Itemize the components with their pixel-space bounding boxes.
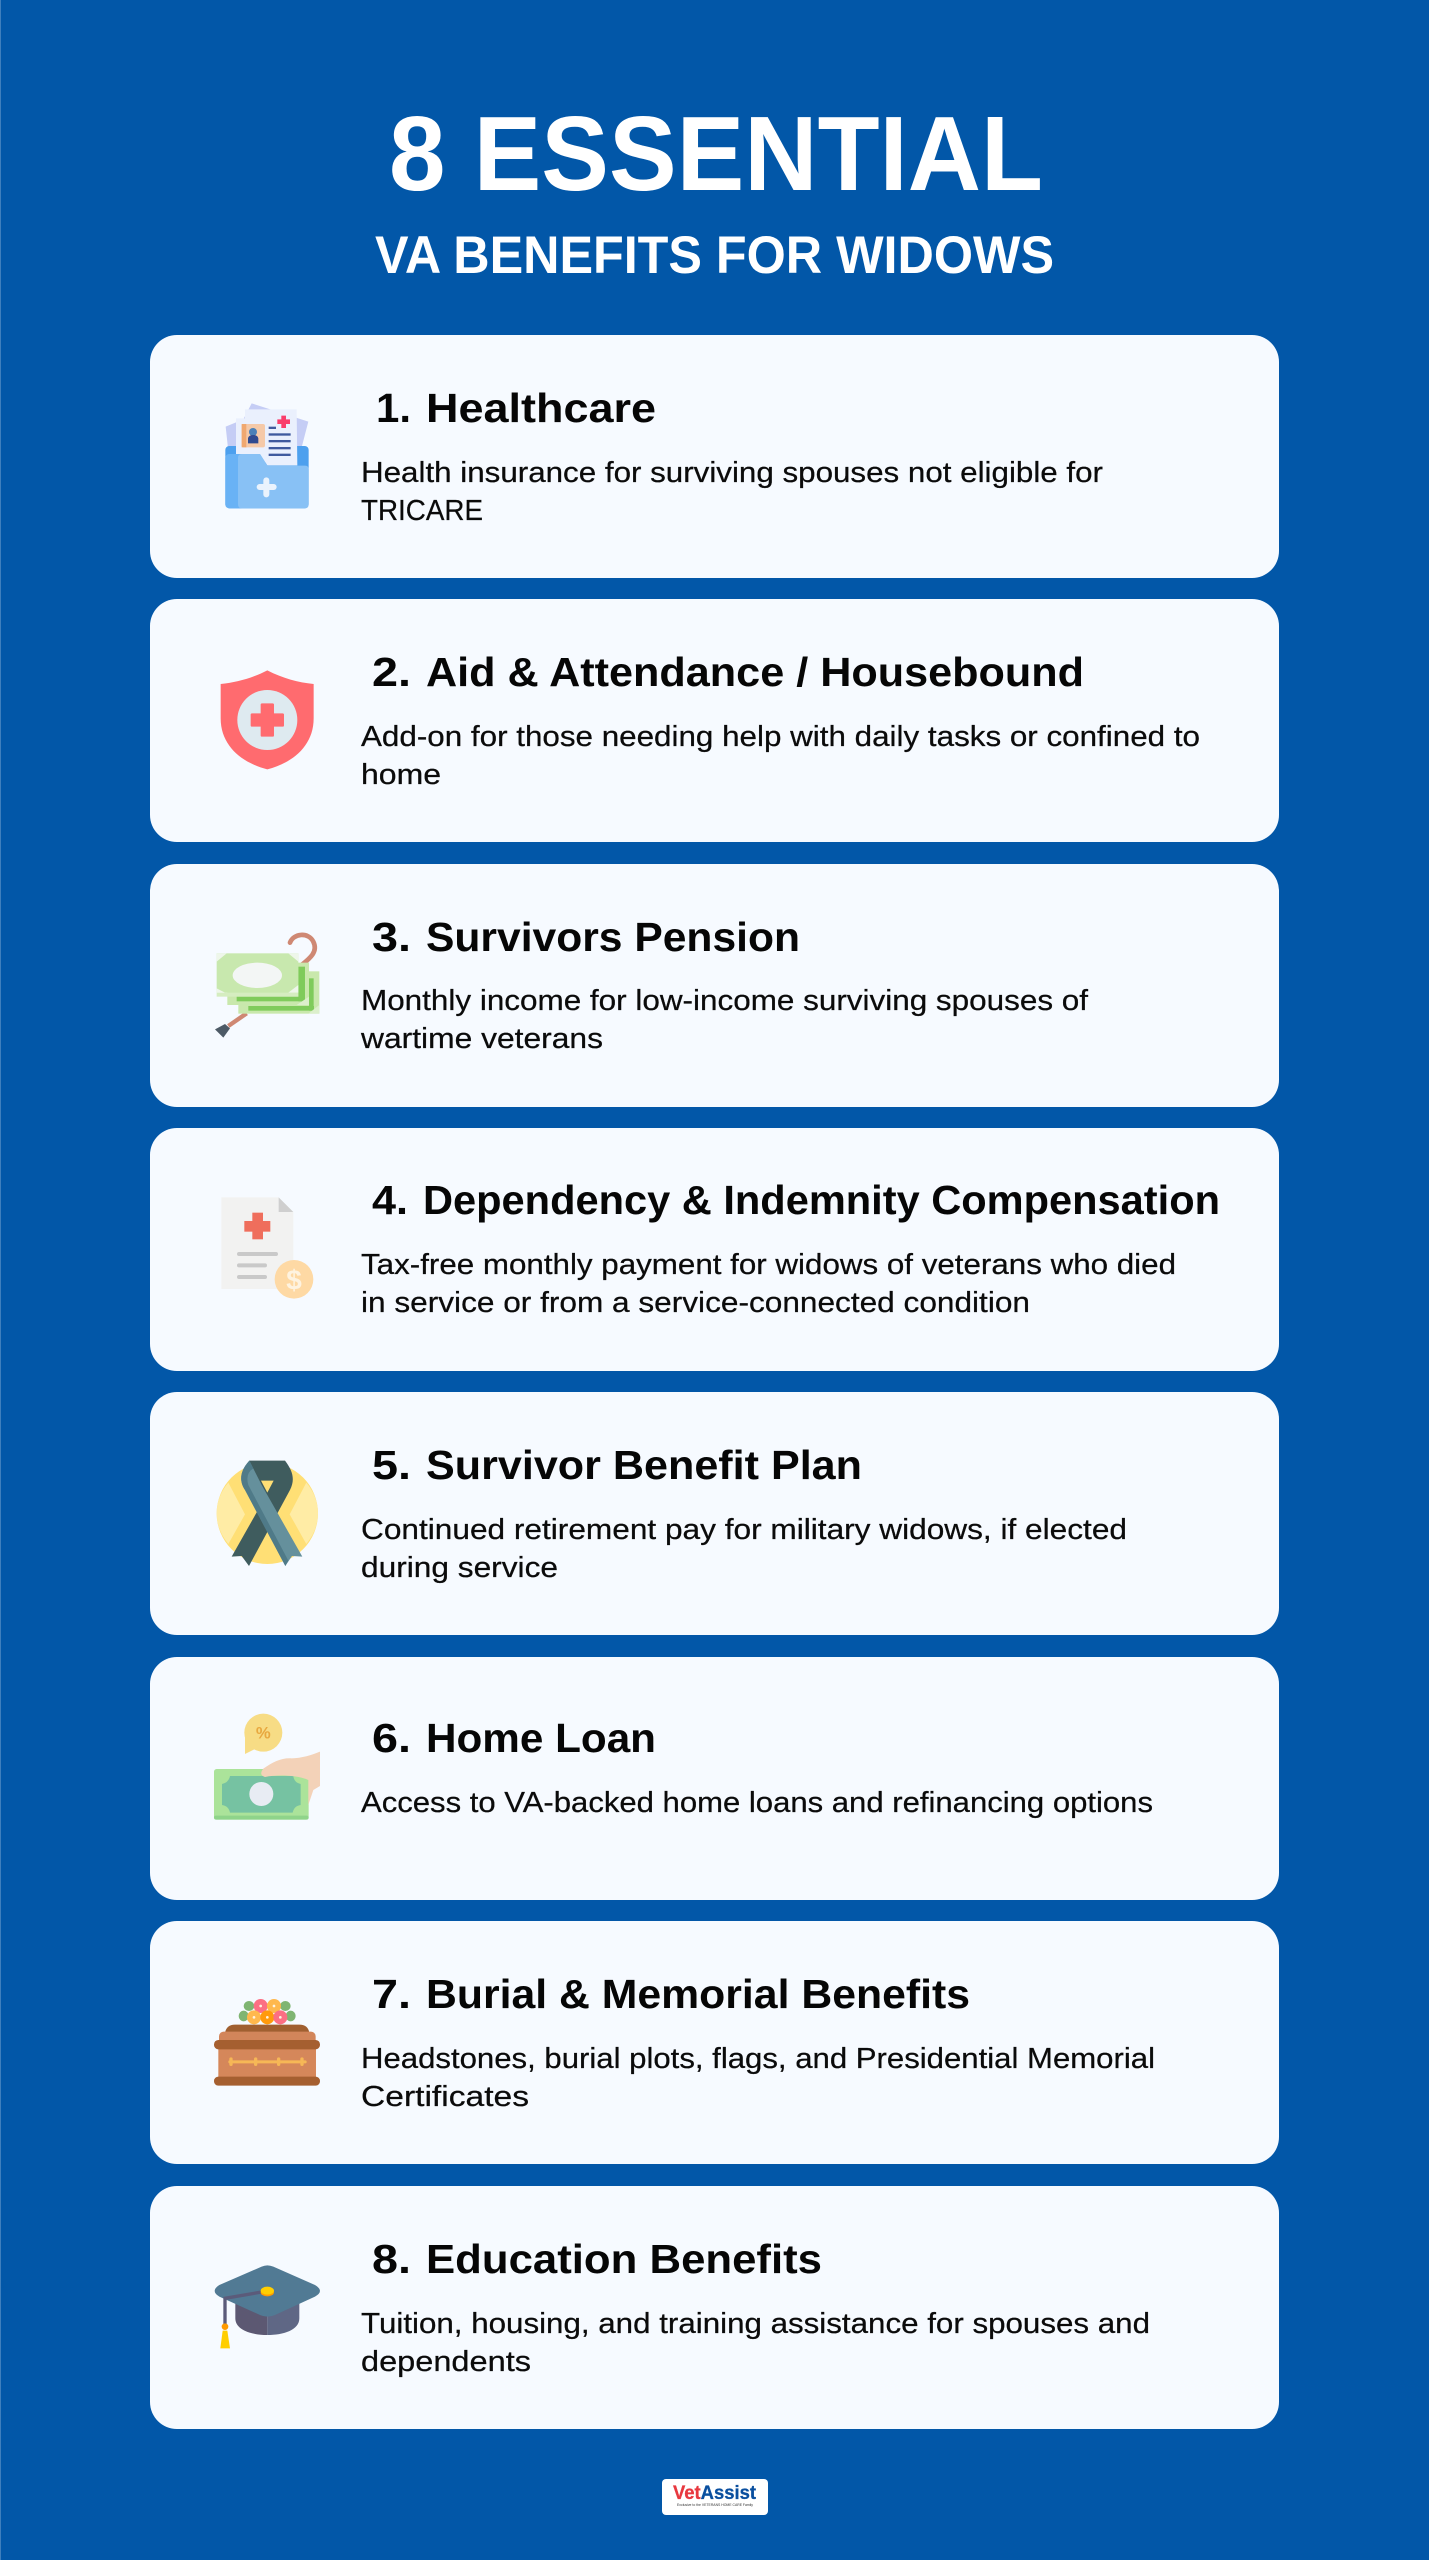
card background xyxy=(150,1128,1279,1371)
heading: 8. xyxy=(372,2236,411,2282)
description: wartime veterans xyxy=(360,1023,603,1055)
heading: Healthcare xyxy=(426,385,656,431)
title: 8 ESSENTIAL xyxy=(389,95,1043,213)
card background xyxy=(150,1392,1279,1635)
icon: graduation cap xyxy=(215,2265,320,2348)
panel: home loan xyxy=(150,1657,1279,1900)
card background xyxy=(150,335,1279,578)
heading: 3. xyxy=(372,914,411,960)
description: Tax-free monthly payment for widows of veterans who died xyxy=(361,1249,1176,1281)
description xyxy=(361,721,1200,791)
panel: survivors pension xyxy=(150,864,1279,1107)
icon: medical folder xyxy=(225,403,309,508)
heading: Survivors Pension xyxy=(426,914,800,960)
card background xyxy=(150,1657,1279,1900)
description: Headstones, burial plots, flags, and Presidential Memorial xyxy=(361,2043,1155,2075)
icon: medical bill: $ xyxy=(286,1264,302,1295)
logo: VetAssist xyxy=(662,2479,768,2515)
heading: 7. xyxy=(372,1971,411,2017)
heading: 4. xyxy=(372,1177,408,1223)
card background xyxy=(150,864,1279,1107)
description: Tuition, housing, and training assistance for spouses and xyxy=(361,2308,1150,2340)
card background xyxy=(150,599,1279,842)
description xyxy=(361,2308,1150,2378)
description: TRICARE xyxy=(361,495,483,527)
description xyxy=(361,1249,1176,1319)
heading: 1. xyxy=(376,385,411,431)
description: Certificates xyxy=(361,2081,529,2113)
panel: burial and memorial benefits xyxy=(150,1921,1279,2164)
icon: hand holding money xyxy=(214,1714,320,1820)
description: Monthly income for low-income surviving spouses of xyxy=(361,985,1089,1017)
card background xyxy=(150,2186,1279,2429)
heading: 2. xyxy=(372,649,411,695)
description: during service xyxy=(361,1552,558,1584)
heading: 6. xyxy=(372,1715,411,1761)
description xyxy=(361,457,1103,527)
subtitle: VA BENEFITS FOR WIDOWS xyxy=(375,226,1054,285)
description: dependents xyxy=(361,2346,531,2378)
card background xyxy=(150,1921,1279,2164)
description xyxy=(361,1514,1127,1584)
panel: survivor benefit plan xyxy=(150,1392,1279,1635)
logo: VetAssist: Exclusive to the VETERANS HOME CARE Family xyxy=(677,2502,753,2507)
icon: money stack with hook xyxy=(215,935,319,1038)
panel: dependency and indemnity compensation xyxy=(150,1128,1279,1371)
description: Add-on for those needing help with daily tasks or confined to xyxy=(361,721,1200,753)
icon: shield xyxy=(221,670,314,769)
logo: VetAssist: VetAssist xyxy=(673,2483,757,2504)
description xyxy=(361,2043,1155,2113)
heading: Home Loan xyxy=(426,1715,656,1761)
description: Access to VA-backed home loans and refinancing options xyxy=(361,1787,1153,1819)
heading: Burial & Memorial Benefits xyxy=(426,1971,970,2017)
description: in service or from a service-connected condition xyxy=(361,1287,1030,1319)
heading: Survivor Benefit Plan xyxy=(426,1442,862,1488)
icon: hand holding money: % xyxy=(256,1724,271,1743)
icon: ribbon xyxy=(217,1461,318,1566)
heading: Dependency & Indemnity Compensation xyxy=(423,1177,1220,1223)
heading: Aid & Attendance / Housebound xyxy=(426,649,1084,695)
description xyxy=(360,985,1089,1055)
description: Continued retirement pay for military widows, if elected xyxy=(361,1514,1127,1546)
heading: Education Benefits xyxy=(426,2236,822,2282)
description: Health insurance for surviving spouses not eligible for xyxy=(361,457,1103,489)
panel: aid and attendance xyxy=(150,599,1279,842)
icon: casket with flowers xyxy=(214,1999,320,2086)
description: home xyxy=(361,759,441,791)
heading: 5. xyxy=(372,1442,411,1488)
panel: education benefits xyxy=(150,2186,1279,2429)
icon: medical bill xyxy=(221,1197,313,1299)
panel: healthcare xyxy=(150,335,1279,578)
